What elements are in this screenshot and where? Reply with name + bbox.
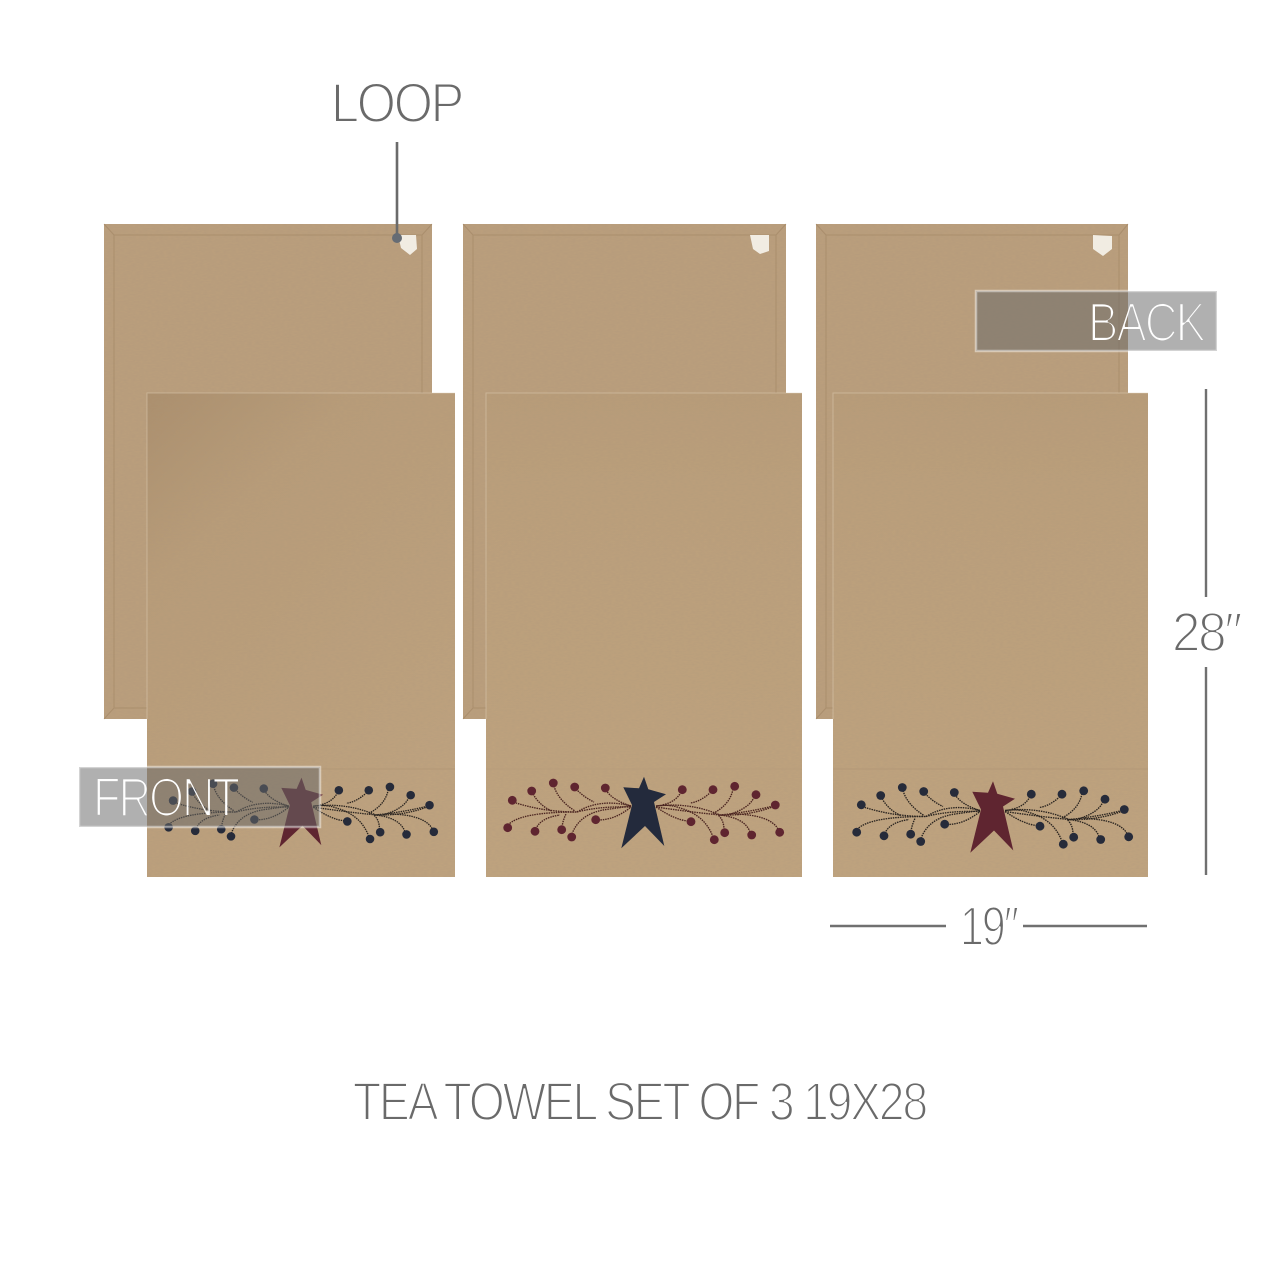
berry sprig and star <box>852 781 1133 853</box>
berry sprig and star <box>164 778 438 847</box>
label: back: BACK <box>1088 291 1206 353</box>
towel front: middle <box>486 393 802 877</box>
label: back <box>976 291 1217 353</box>
towel back: right <box>816 224 1128 719</box>
berry sprig and star <box>503 777 784 848</box>
towel front: right <box>833 393 1148 877</box>
dimension: width 19 inches: 19″ <box>960 895 1019 957</box>
front towels row <box>147 393 1148 877</box>
towel back: left <box>104 224 432 719</box>
callout: loop <box>331 71 462 243</box>
label: front: FRONT <box>93 766 240 828</box>
loop tag <box>750 235 769 254</box>
towel back: middle <box>463 224 786 719</box>
loop pointer line <box>396 142 398 238</box>
loop tag <box>1093 235 1112 256</box>
title: TEA TOWEL SET OF 3 19X28 <box>353 1072 926 1132</box>
loop label: LOOP <box>331 71 462 134</box>
dimension: height 28 inches: 28″ <box>1172 601 1242 663</box>
towel front: left <box>147 393 455 877</box>
loop tag <box>398 235 417 255</box>
loop pointer dot <box>392 233 402 243</box>
back towels row <box>104 224 1128 719</box>
